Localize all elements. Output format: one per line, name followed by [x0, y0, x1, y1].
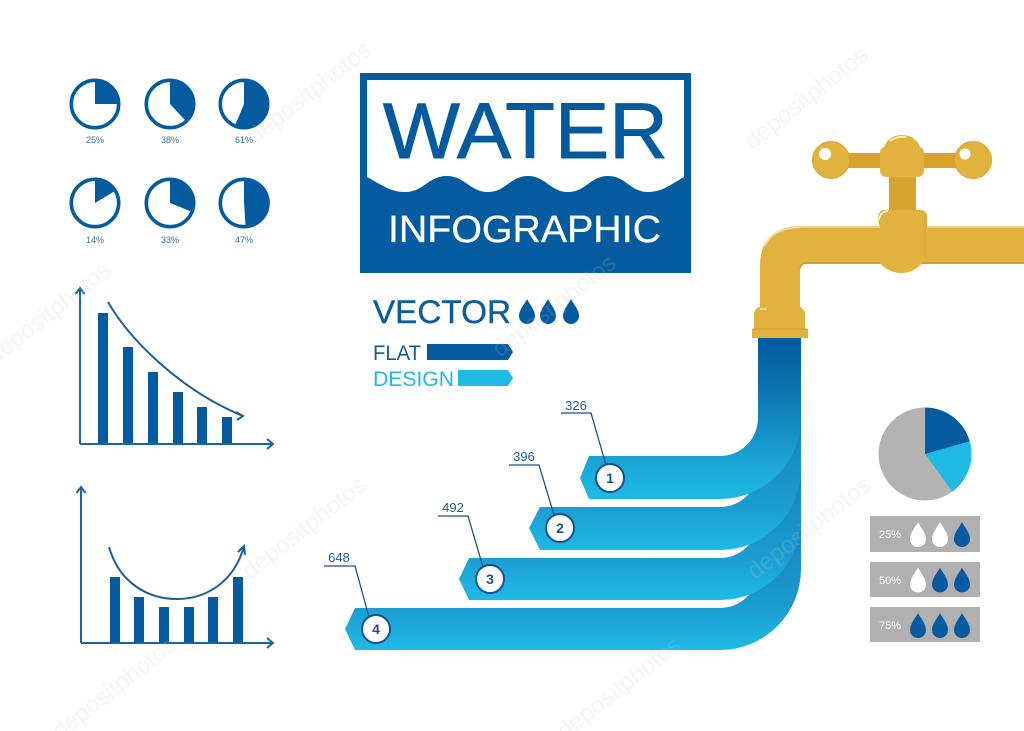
callout 2	[509, 449, 574, 542]
callout 3: 3	[486, 571, 494, 587]
callout 3: 492	[442, 500, 464, 515]
watermarks: depositphotos	[487, 249, 621, 363]
pie 47%	[220, 178, 270, 245]
flat label with arrow bar: FLAT	[373, 342, 421, 365]
large pie chart	[878, 408, 972, 500]
rating row 50%	[870, 562, 980, 597]
title: WATER: WATER	[383, 86, 668, 175]
flat label with arrow bar	[373, 342, 513, 365]
callout 1: 1	[606, 470, 614, 486]
watermarks: depositphotos	[237, 471, 371, 585]
pie 14%	[71, 178, 119, 245]
design label with arrow bar: DESIGN	[373, 368, 454, 391]
watermarks: depositphotos	[242, 36, 376, 150]
callout 2: 396	[513, 449, 535, 464]
callout 1: 326	[565, 398, 587, 413]
callout 4: 648	[328, 550, 350, 565]
faucet pipe	[760, 226, 1024, 310]
pie 61%: 61%	[235, 135, 253, 145]
callout 2: 2	[556, 520, 564, 536]
pie 47%: 47%	[235, 235, 253, 245]
water streams	[345, 336, 801, 650]
vector label with drops	[373, 294, 579, 330]
stream 4	[345, 480, 801, 650]
pie 14%: 14%	[86, 235, 104, 245]
title block	[360, 73, 691, 273]
pie 33%	[146, 178, 195, 245]
callout 4	[324, 550, 390, 643]
pie 61%	[220, 79, 269, 145]
bar chart: U-shaped trend	[76, 487, 273, 648]
vector label with drops: VECTOR	[373, 294, 511, 330]
rating row 75%	[870, 607, 980, 642]
callout 1	[561, 398, 624, 492]
pie 38%	[146, 79, 195, 145]
stream 3	[459, 440, 801, 600]
faucet nut	[754, 307, 805, 330]
pie 33%: 33%	[161, 235, 179, 245]
pie 25%	[71, 79, 120, 145]
rating row 75%: 75%	[879, 620, 901, 632]
design label with arrow bar	[373, 368, 513, 391]
pie 25%: 25%	[86, 135, 104, 145]
subtitle: INFOGRAPHIC: INFOGRAPHIC	[388, 209, 661, 251]
pie 38%: 38%	[161, 135, 179, 145]
rating row 25%: 25%	[879, 529, 901, 541]
watermarks: depositphotos	[739, 41, 873, 155]
faucet	[752, 135, 1024, 338]
callout 3	[438, 500, 504, 593]
bar chart: falling trend	[76, 288, 273, 449]
pie icons group	[71, 79, 270, 245]
faucet collar	[878, 210, 927, 273]
watermarks: depositphotos	[742, 471, 876, 585]
rating row 50%: 50%	[879, 575, 901, 587]
stream 2	[529, 400, 801, 550]
faucet handle	[812, 135, 992, 212]
stream 1	[580, 336, 801, 499]
rating row 25%	[870, 516, 980, 552]
callout 4: 4	[372, 621, 380, 637]
